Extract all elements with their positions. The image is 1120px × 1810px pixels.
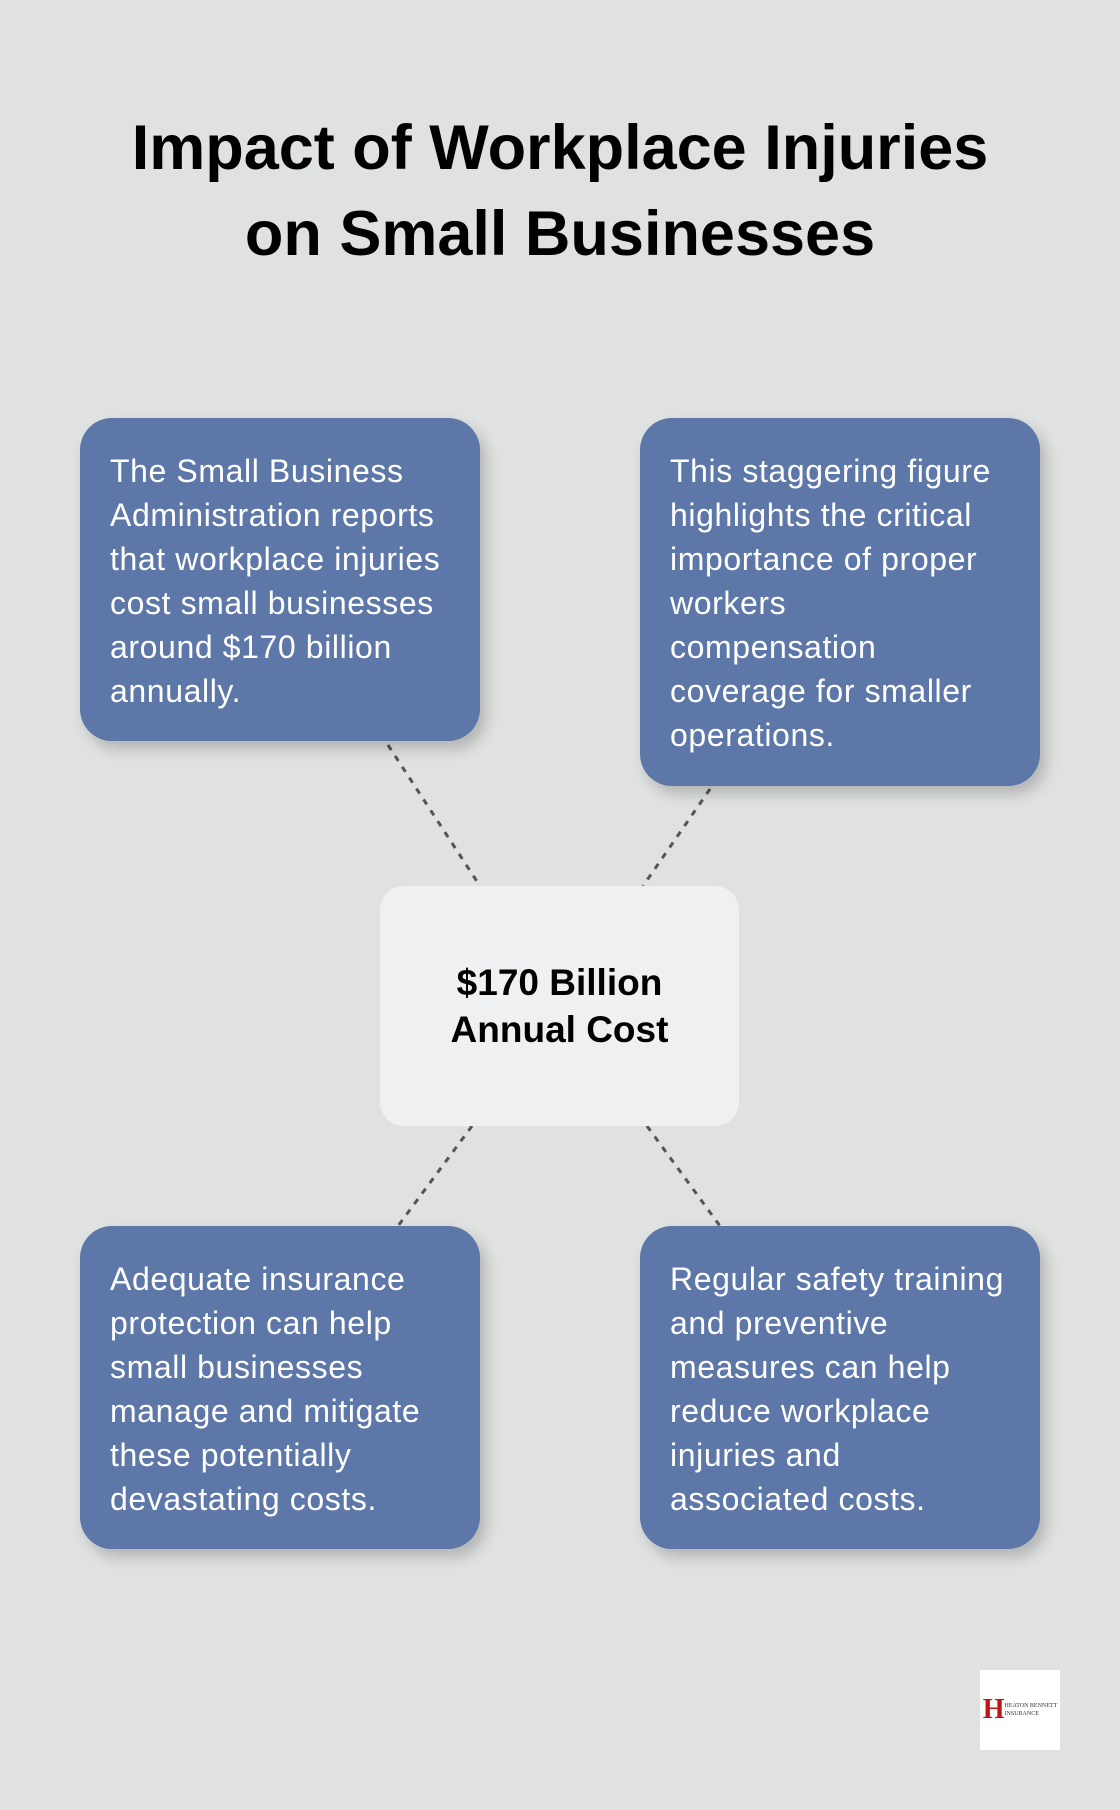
panel: bottom left: devastating costs. (110, 1481, 377, 1517)
panel: top right: importance of proper (670, 541, 977, 577)
title: Impact of Workplace Injuries (132, 113, 988, 183)
logo (980, 1670, 1060, 1750)
panel: top right: highlights the critical (670, 497, 972, 533)
panel: top right: compensation (670, 629, 876, 665)
panel: top left: Administration reports (110, 497, 434, 533)
panel: top left: around $170 billion (110, 629, 392, 665)
panel: bottom right: associated costs. (670, 1481, 926, 1517)
title: on Small Businesses (245, 199, 875, 269)
panel: top left: annually. (110, 673, 241, 709)
title (132, 113, 988, 269)
panel: bottom left: small businesses (110, 1349, 363, 1385)
panel: top left: The Small Business (110, 453, 404, 489)
panel: bottom right: and preventive (670, 1305, 888, 1341)
panel: top left: cost small businesses (110, 585, 434, 621)
panel: top right: workers (670, 585, 786, 621)
center box (380, 886, 739, 1126)
panel: top right: This staggering figure (670, 453, 991, 489)
logo: H (983, 1694, 1005, 1725)
panel: bottom right: Regular safety training (670, 1261, 1004, 1297)
panel: bottom right: measures can help (670, 1349, 951, 1385)
panel: top right (640, 418, 1040, 786)
panel: bottom right (640, 1226, 1040, 1549)
panel: bottom left (80, 1226, 480, 1549)
panel: bottom left: Adequate insurance (110, 1261, 405, 1297)
panel: bottom left: these potentially (110, 1437, 351, 1473)
center box: $170 Billion (457, 962, 662, 1003)
logo: HEATON BENNETT (1005, 1703, 1057, 1709)
panel: bottom left: manage and mitigate (110, 1393, 420, 1429)
panel: top left: that workplace injuries (110, 541, 440, 577)
panel: top left (80, 418, 480, 741)
panel: bottom right: reduce workplace (670, 1393, 930, 1429)
center box: Annual Cost (451, 1009, 668, 1050)
panel: top right: operations. (670, 717, 835, 753)
panel: top right: coverage for smaller (670, 673, 972, 709)
panel: bottom left: protection can help (110, 1305, 392, 1341)
panel: bottom right: injuries and (670, 1437, 841, 1473)
logo: INSURANCE (1005, 1711, 1039, 1717)
